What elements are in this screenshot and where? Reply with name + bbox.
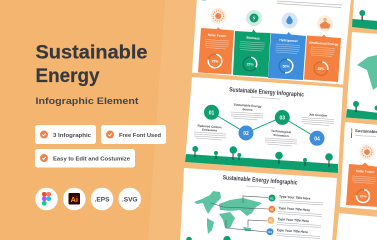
text block: Technological Innovation: Innovation xyxy=(273,133,289,138)
panel: Solar Power xyxy=(198,27,234,74)
panel: Geothermal Energy: 25% xyxy=(317,67,325,71)
node 02 xyxy=(238,126,254,140)
subtitle: Infographic Element xyxy=(36,96,139,107)
node 04: 04 xyxy=(314,136,320,142)
marker 04: 04 xyxy=(268,230,272,234)
text block: Sustainable Energy Source: Sustainable Energy xyxy=(234,103,262,108)
icon: Adobe Illustrator: Ai xyxy=(70,195,78,204)
trees xyxy=(195,150,329,167)
list text xyxy=(276,195,323,238)
marker 01: 01 xyxy=(270,196,274,200)
panel: Geothermal Energy: Geothermal Energy xyxy=(309,40,339,47)
panel: right card map xyxy=(346,32,377,120)
icon: Figma xyxy=(35,188,58,210)
heading: Sustainable Energy Infographic xyxy=(222,174,298,187)
panel: Biomass: Biomass xyxy=(246,36,260,40)
text block: Technological Innovation: Technological xyxy=(271,129,291,134)
title xyxy=(36,42,148,87)
panel: right card solar: 75% xyxy=(359,194,367,198)
title: Sustainable xyxy=(36,42,148,64)
list text: Type Your Title Here xyxy=(276,228,308,234)
text block: Technological Innovation xyxy=(265,129,297,146)
world map xyxy=(194,191,262,234)
panel: right card top xyxy=(352,0,377,30)
node 01 xyxy=(204,105,219,120)
ground xyxy=(185,154,338,173)
node 03 xyxy=(275,110,290,125)
icon: biomass xyxy=(246,10,262,26)
marker 02: 02 xyxy=(270,208,274,212)
file format icons xyxy=(35,188,141,210)
icon: hydropower xyxy=(282,12,298,28)
connector line xyxy=(211,112,317,138)
panel: Solar Power: 75% xyxy=(211,59,219,63)
panel: right card solar: Solar Power xyxy=(356,169,375,174)
marker 01 xyxy=(268,194,276,202)
panel: right card solar xyxy=(340,122,377,210)
bottom trees xyxy=(186,236,231,240)
text block: Sustainable Energy Source: Source xyxy=(242,107,253,112)
marker 02 xyxy=(268,206,275,213)
feature badges xyxy=(35,125,166,168)
text block: Sustainable Energy Source xyxy=(231,103,263,120)
panel: Biomass: 25% xyxy=(246,62,254,66)
icon: EPS: .EPS xyxy=(95,196,110,204)
marker 03: 03 xyxy=(269,218,273,222)
list text: Type Your Title Here xyxy=(277,217,309,223)
panel: right card solar: Sustainable xyxy=(355,128,377,134)
node 02: 02 xyxy=(243,131,249,137)
panel: Hydropower: 50% xyxy=(282,64,290,68)
panel: Biomass xyxy=(233,30,270,77)
list text: Type Your Title Here xyxy=(278,206,310,212)
icon: geothermal xyxy=(317,16,333,32)
panel: right card bottom xyxy=(336,213,377,240)
map connectors xyxy=(211,196,268,232)
text block: Reduced Carbon Emissions xyxy=(194,124,226,140)
node 01: 01 xyxy=(209,110,214,116)
text block: Reduced Carbon Emissions: Reduced Carbon xyxy=(197,124,222,129)
title: Energy xyxy=(36,65,100,87)
badge: Easy to Edit and Costumize: Easy to Edit and Costumize xyxy=(53,156,130,162)
badge: Free Font Used: Free Font Used xyxy=(119,133,162,139)
marker 03 xyxy=(267,217,274,224)
list text: Type Your Title Here xyxy=(279,195,311,201)
panel: world map infographic xyxy=(180,168,337,240)
panel: Hydropower: Hydropower xyxy=(279,38,299,43)
icon: solar xyxy=(210,8,226,24)
panel: timeline infographic xyxy=(185,77,343,173)
node 04 xyxy=(310,131,324,146)
marker 04 xyxy=(266,228,274,235)
panel: Hydropower xyxy=(268,32,306,80)
text block: Reduced Carbon Emissions: Emissions xyxy=(202,127,218,133)
panel: Solar Power: Solar Power xyxy=(208,33,227,38)
header text lines xyxy=(277,1,342,8)
icon: SVG: .SVG xyxy=(122,196,137,204)
node 03: 03 xyxy=(280,116,285,122)
panel: energy cards infographic xyxy=(192,0,351,84)
panel: Geothermal Energy xyxy=(304,34,341,82)
text block: Job Creation: Job Creation xyxy=(309,112,328,118)
heading: Sustainable Energy Infographic xyxy=(229,86,305,99)
badge: 3 Infographic: 3 Infographic xyxy=(53,133,91,139)
text block: Job Creation xyxy=(302,112,334,126)
